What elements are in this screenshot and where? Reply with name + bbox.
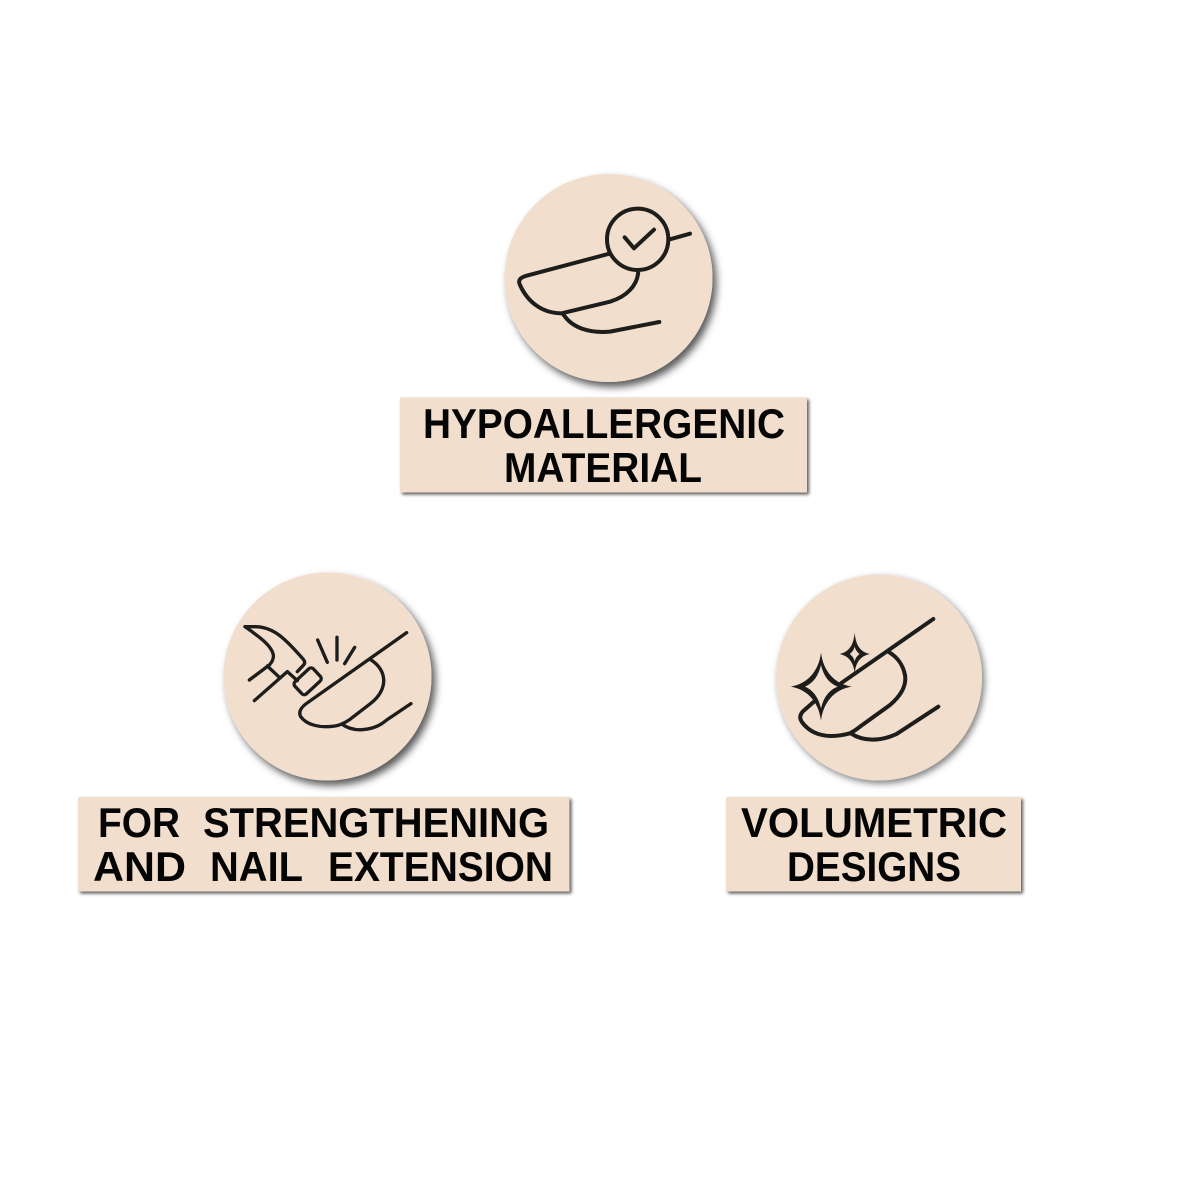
label: for strengthening and nail extension: STRENGTHENING bbox=[203, 799, 549, 846]
icon badge: hammer striking nail bbox=[224, 572, 432, 780]
label: hypoallergenic material: MATERIAL bbox=[504, 444, 702, 491]
label: volumetric designs: DESIGNS bbox=[787, 843, 961, 890]
label: for strengthening and nail extension: AND bbox=[93, 843, 186, 890]
label: volumetric designs: VOLUMETRIC bbox=[741, 799, 1007, 846]
feature: hypoallergenic material bbox=[400, 174, 807, 492]
icon badge: nail with sparkles bbox=[776, 574, 982, 780]
label: for strengthening and nail extension bbox=[78, 797, 570, 892]
feature: volumetric designs bbox=[726, 574, 1021, 892]
label: hypoallergenic material: HYPOALLERGENIC bbox=[423, 400, 785, 447]
label: for strengthening and nail extension: NAIL bbox=[210, 843, 303, 890]
label: for strengthening and nail extension: EXTENSION bbox=[328, 843, 553, 890]
label: for strengthening and nail extension: FOR bbox=[98, 799, 180, 846]
icon badge: nail with check mark bbox=[504, 174, 712, 382]
feature: for strengthening and nail extension bbox=[78, 572, 570, 892]
label: volumetric designs bbox=[726, 797, 1021, 892]
label: hypoallergenic material bbox=[400, 398, 807, 492]
